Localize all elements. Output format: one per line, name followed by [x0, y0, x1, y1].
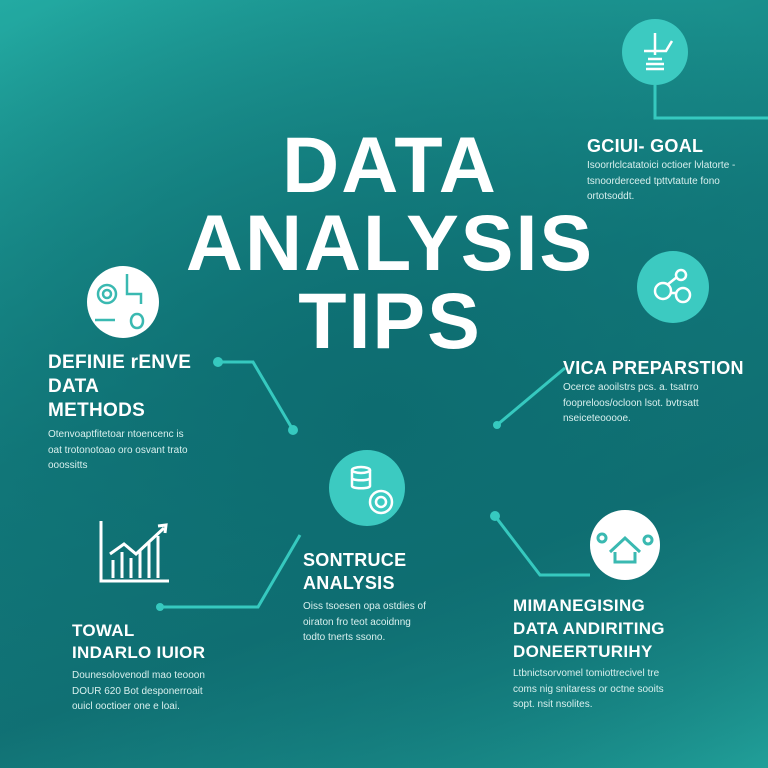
icon: governance: [590, 510, 660, 580]
icon: analysis: [329, 450, 405, 526]
text: preparation: VICA PREPARSTION: [563, 358, 744, 378]
text: preparation: foopreloos/ocloon lsot. bvtrsatt: [563, 398, 699, 408]
text: analysis: oiraton fro teot acoidnng: [303, 616, 411, 628]
text: analysis: ANALYSIS: [303, 573, 395, 593]
title: ANALYSIS: [186, 198, 594, 287]
text: goal: GCIUI- GOAL: [587, 136, 703, 156]
text: governance: coms nig snitaress or octne sooits: [513, 684, 664, 694]
text: goal: Isoorrlclcatatoici octioer lvlatorte -: [587, 160, 735, 171]
icon: goal: [622, 19, 688, 85]
text: define: DEFINIE rENVE: [48, 352, 191, 373]
icon: bar chart: [100, 521, 169, 582]
text: preparation: Ocerce aooilstrs pcs. a. tsatrro: [563, 382, 699, 393]
title: [186, 120, 594, 365]
text: total: Dounesolovenodl mao teooon: [72, 670, 205, 681]
icon: define: [87, 266, 159, 338]
text: total: [72, 621, 205, 712]
text: goal: ortotsoddt.: [587, 191, 634, 202]
text: define: ooossitts: [48, 460, 87, 471]
text: total: TOWAL: [72, 621, 135, 640]
text: analysis: Oiss tsoesen opa ostdies of: [303, 601, 426, 612]
text: governance: MIMANEGISING: [513, 596, 645, 615]
text: total: DOUR 620 Bot desponerroait: [72, 686, 203, 696]
title: TIPS: [298, 276, 482, 365]
text: define: Otenvoaptfitetoar ntoencenc is: [48, 429, 184, 440]
text: analysis: todto tnerts ssono.: [303, 632, 385, 643]
text: define: [48, 352, 191, 471]
icon: preparation: [637, 251, 709, 323]
text: governance: DATA ANDIRITING: [513, 619, 665, 638]
text: total: ouicl ooctioer one e loai.: [72, 701, 180, 712]
text: governance: DONEERTURIHY: [513, 642, 653, 661]
text: preparation: nseiceteooooe.: [563, 413, 631, 424]
text: governance: Ltbnictsorvomel tomiottrecivel tre: [513, 668, 659, 679]
text: analysis: [303, 550, 426, 643]
text: total: INDARLO IUIOR: [72, 643, 205, 662]
title: DATA: [282, 120, 498, 209]
text: define: DATA: [48, 376, 99, 397]
text: governance: sopt. nsit nsolites.: [513, 699, 592, 710]
text: goal: tsnoorderceed tpttvtatute fono: [587, 176, 720, 186]
text: analysis: SONTRUCE: [303, 550, 406, 570]
text: preparation: [563, 358, 744, 424]
text: governance: [513, 596, 665, 710]
text: goal: [587, 136, 735, 202]
text: define: METHODS: [48, 400, 145, 421]
text: define: oat trotonotoao oro osvant trato: [48, 444, 188, 456]
